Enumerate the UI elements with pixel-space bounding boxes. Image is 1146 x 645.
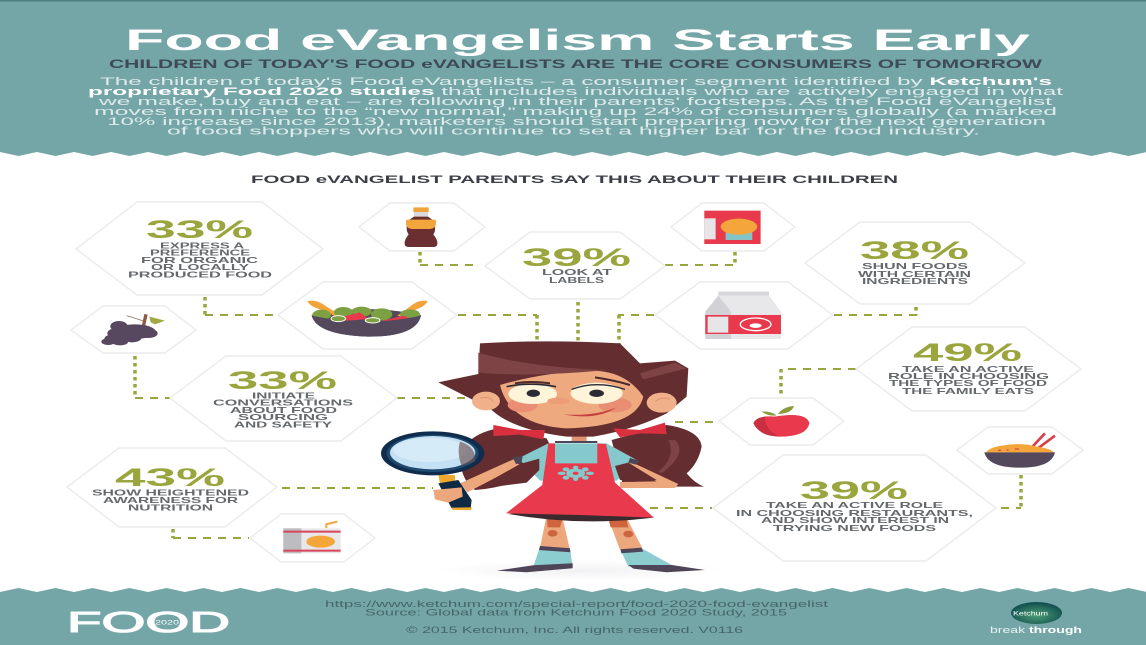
logo: break through: break through [990,625,1082,635]
shirt and arms [460,443,678,492]
panel: 39% look at labels: LOOK AT [542,268,612,277]
icon: grapes [71,306,196,353]
panel: 33% organic preference: EXPRESS A [160,241,244,250]
panel: 43% nutrition awareness: AWARENESS FOR [103,496,238,505]
panel: 39% restaurants: TAKE AN ACTIVE ROLE [766,501,944,510]
ears [472,392,677,413]
pigtails [459,425,704,490]
dashed connectors [135,252,1021,538]
intro paragraph: of food shoppers who will continue to set a higher bar for the food industry. [167,126,980,138]
source text: © 2015 Ketchum, Inc. All rights reserved. V0116 [406,625,743,635]
panel: 33% organic preference: FOR ORGANIC [141,256,258,265]
panel: 43% nutrition awareness: 43% [115,464,225,492]
panel: 33% organic preference: 33% [146,216,253,244]
subtitle: CHILDREN OF TODAY'S FOOD eVANGELISTS ARE THE CORE CONSUMERS OF TOMORROW [109,58,1042,71]
source text: https://www.ketchum.com/special-report/food-2020-food-evangelist [325,599,829,609]
panel: 33% initiate conversations: 33% [228,367,337,395]
panel: 49% family food role: THE FAMILY EATS [902,387,1035,396]
panel: 33% initiate conversations: INITIATE [252,391,316,400]
intro paragraph [88,76,1065,138]
panel: 49% family food role: ROLE IN CHOOSING [888,372,1049,381]
intro paragraph: moves from niche to the “new normal,” making up 24% of consumers globally (a marked [94,106,1057,118]
panel: 39% look at labels: 39% [522,244,631,272]
section heading: FOOD eVANGELIST PARENTS SAY THIS ABOUT THEIR CHILDREN [251,174,898,186]
magnifying glass [381,431,484,510]
panel: 49% family food role: 49% [913,339,1022,367]
panel: 38% shun foods: INGREDIENTS [862,277,969,286]
intro paragraph: The children of today's Food eVangelists – a consumer segment identified by Ketchum's [100,76,1052,88]
panel: 38% shun foods: WITH CERTAIN [858,270,971,279]
intro paragraph: we make, buy and eat – are following in their parents' footsteps. As the Food eVangelist [97,96,1054,108]
header banner [0,0,1146,156]
source text: Source: Global data from Ketchum Food 2020 Study, 2015 [365,608,787,618]
panel: 33% organic preference: PRODUCED FOOD [128,270,272,279]
panel: 39% look at labels: LABELS [549,276,605,285]
icon: salad bowl [278,282,457,349]
head hair [438,341,688,437]
dress [506,441,654,521]
logo: Ketchum: Ketchum [1013,612,1048,618]
neck [572,425,587,442]
illustration: girl with magnifying glass [381,341,727,581]
panel: 33% organic preference [76,202,323,295]
panel: 39% restaurants [713,455,996,561]
title: Food eVangelism Starts Early [125,24,1031,57]
hair bows [493,423,667,439]
hair highlights [478,353,687,379]
footer banner [0,588,1146,645]
panel: 38% shun foods: 38% [860,237,969,265]
icon: soda bottle [359,203,485,251]
panel: 39% restaurants: 39% [800,477,908,505]
icon: noodle bowl [957,427,1083,474]
face [500,371,643,428]
panel: 39% restaurants: IN CHOOSING RESTAURANTS, [736,509,973,518]
panel: 43% nutrition awareness: SHOW HEIGHTENED [92,489,249,498]
panel: 49% family food role [856,327,1081,411]
panel: 38% shun foods: SHUN FOODS [862,262,969,271]
logo: FOOD 2020: 2020 [155,620,180,626]
panel: 33% initiate conversations: ABOUT FOOD [230,406,337,415]
logo: Ketchum [1011,602,1062,624]
panel: 33% initiate conversations: AND SAFETY [234,421,333,430]
intro paragraph: 10% increase since 2013), marketers should start preparing now for the next generation [107,116,1046,128]
panel: 39% restaurants: TRYING NEW FOODS [773,524,937,533]
icon: apple [719,398,844,445]
legs and socks [497,515,705,572]
icon: milk carton [655,282,833,349]
panel: 43% nutrition awareness: NUTRITION [128,504,213,513]
panel: 33% organic preference: PREFERENCE [150,249,251,258]
panel: 39% restaurants: AND SHOW INTEREST IN [761,516,949,525]
panel: 49% family food role: THE TYPES OF FOOD [889,379,1047,388]
intro paragraph: proprietary Food 2020 studies that includes individuals who are actively engaged in what [88,86,1065,98]
panel: 49% family food role: TAKE AN ACTIVE [902,365,1035,374]
panel: 33% initiate conversations: CONVERSATIONS [213,399,354,408]
panel: 33% initiate conversations: SOURCING [238,413,328,422]
facial features [507,377,632,416]
logo: FOOD 2020: FOOD [67,607,230,639]
source text [325,599,829,635]
icon: muffin package [671,203,795,251]
panel: 39% look at labels [485,232,665,299]
logo: FOOD 2020 [67,607,230,639]
panel: 43% nutrition awareness [67,448,277,527]
panel: 38% shun foods [805,222,1025,304]
icon: juice box [250,514,375,562]
panel: 33% organic preference: OR LOCALLY [151,263,250,272]
panel: 33% initiate conversations [170,356,397,441]
